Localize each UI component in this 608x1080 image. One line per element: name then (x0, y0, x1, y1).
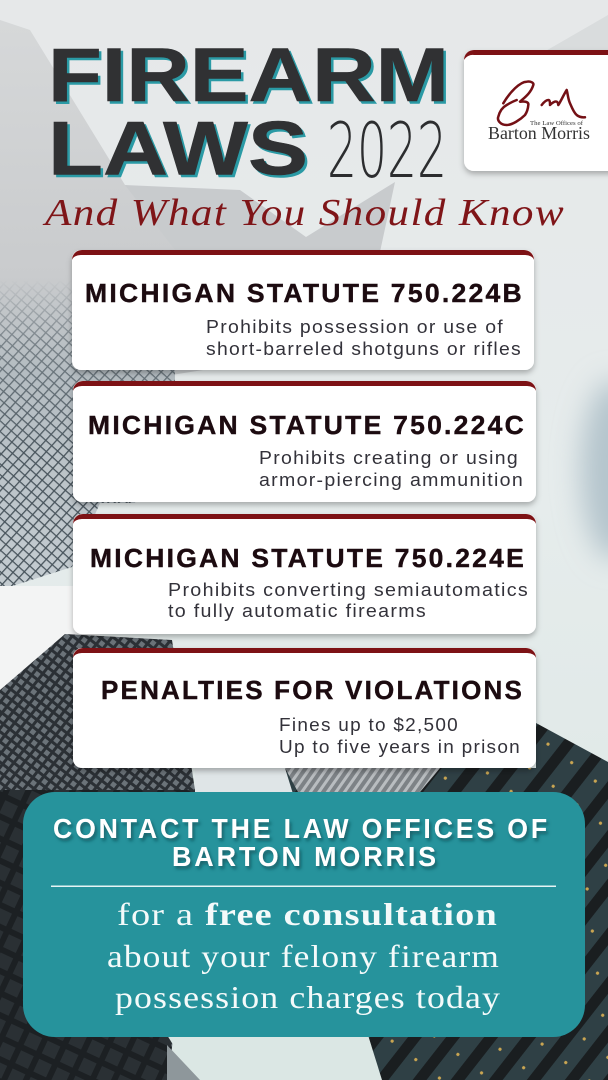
heading word: LAWS: LAWS (50, 109, 310, 194)
consultation text: for a free consultation (117, 896, 498, 932)
panel: statute 750.224C (73, 381, 536, 502)
consultation text: about your felony firearm (107, 938, 500, 974)
contact heading (53, 813, 550, 872)
contact heading: BARTON MORRIS (172, 841, 439, 872)
consultation text: possession charges today (115, 979, 501, 1015)
panel: statute 750.224B (72, 250, 534, 370)
consultation text (107, 896, 501, 1015)
heading word: FIREARM: FIREARM (48, 33, 449, 118)
subtitle: And What You Should Know (42, 192, 565, 234)
panel: call to action (23, 792, 585, 1037)
description: Prohibits converting semiautomatics (168, 580, 529, 600)
description: armor-piercing ammunition (259, 470, 524, 490)
panel: statute 750.224E (73, 514, 536, 634)
heading: PENALTIES FOR VIOLATIONS (101, 675, 524, 705)
description: Prohibits creating or using (259, 448, 519, 468)
logo name: Barton Morris (488, 123, 590, 143)
description: Fines up to $2,500 (279, 715, 459, 735)
title: FIREARM LAWS 2022 (48, 33, 452, 195)
description (168, 580, 529, 621)
contact heading: CONTACT THE LAW OFFICES OF (53, 813, 550, 844)
heading: MICHIGAN STATUTE 750.224B (85, 278, 524, 308)
heading: MICHIGAN STATUTE 750.224E (90, 543, 526, 573)
panel: penalties (73, 648, 536, 768)
logo card (464, 50, 608, 171)
description (259, 448, 524, 490)
description: Prohibits possession or use of (206, 317, 504, 337)
heading word: FIREARM: FIREARM (50, 36, 452, 120)
heading: MICHIGAN STATUTE 750.224C (88, 410, 526, 440)
logo small text: The Law Offices of (530, 120, 584, 127)
heading year: 2022: 2022 (327, 106, 447, 195)
description (206, 317, 522, 359)
heading word: LAWS: LAWS (48, 106, 308, 192)
icon: signature monogram (498, 82, 585, 125)
description: short-barreled shotguns or rifles (206, 339, 522, 359)
description (279, 715, 521, 757)
description: Up to five years in prison (279, 737, 521, 757)
description: to fully automatic firearms (168, 601, 427, 621)
